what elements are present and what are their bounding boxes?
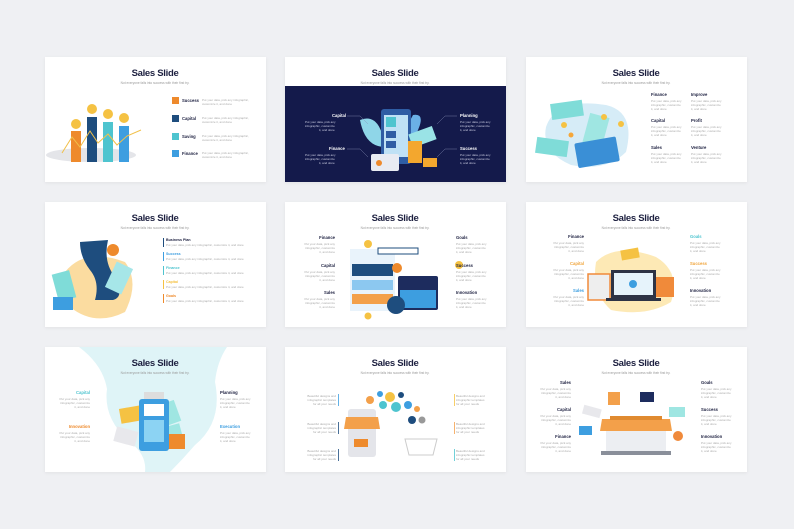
labels: Capital bbox=[332, 113, 346, 118]
labels: Success bbox=[690, 261, 708, 266]
six text items: Put your data, pick any bbox=[691, 125, 722, 129]
list: Goals bbox=[166, 294, 176, 298]
title: Sales Slide bbox=[613, 358, 659, 369]
six text items: infographic, customize bbox=[691, 103, 721, 107]
labels: Sales bbox=[560, 380, 572, 385]
labels: it, and done bbox=[555, 395, 571, 399]
labels: Put your data, pick any bbox=[460, 120, 491, 124]
labels: infographic, customize bbox=[701, 445, 731, 449]
labels: Put your data, pick any bbox=[540, 441, 571, 445]
labels: Put your data, pick any bbox=[305, 153, 336, 157]
six text items: infographic, customize bbox=[651, 129, 681, 133]
labels: Goals bbox=[690, 234, 702, 239]
slide 5: briefcase web: infographic, customize bbox=[456, 274, 486, 278]
list: success/capital/saving/finance: Put your data, pick any infographic, bbox=[202, 134, 249, 138]
list: Put your data, pick any infographic, customize it, and done bbox=[166, 299, 244, 303]
title: Sales Slide bbox=[132, 358, 178, 369]
slide 2: dark mobile banking bbox=[285, 57, 506, 182]
labels: Innovation bbox=[690, 288, 712, 293]
labels: Sales bbox=[573, 288, 585, 293]
subtitle: Not everyone falls into success with their first try. bbox=[361, 81, 429, 85]
six text items: infographic, customize bbox=[691, 129, 721, 133]
labels: infographic, customize bbox=[220, 401, 250, 405]
labels: Success bbox=[701, 407, 719, 412]
labels: it, and done bbox=[701, 395, 717, 399]
text blocks: infographic templates bbox=[307, 453, 336, 457]
six text items: infographic, customize bbox=[651, 156, 681, 160]
labels: it, and done bbox=[319, 128, 335, 132]
text blocks: infographic templates bbox=[456, 426, 485, 430]
labels: Put your data, pick any bbox=[701, 441, 732, 445]
labels: infographic, customize bbox=[60, 435, 90, 439]
slide 4: receipt list bbox=[45, 202, 266, 327]
labels: Put your data, pick any bbox=[304, 270, 335, 274]
labels: it, and done bbox=[460, 128, 476, 132]
laptop illustration bbox=[588, 248, 674, 312]
list: success/capital/saving/finance bbox=[172, 97, 249, 159]
labels: Put your data, pick any bbox=[220, 431, 251, 435]
list: success/capital/saving/finance: Put your data, pick any infographic, bbox=[202, 116, 249, 120]
labels: infographic, customize bbox=[60, 401, 90, 405]
labels: infographic, customize bbox=[541, 445, 571, 449]
wallet illustration bbox=[535, 100, 628, 168]
six text items: infographic, customize bbox=[651, 103, 681, 107]
labels: infographic, customize bbox=[541, 418, 571, 422]
labels: it, and done bbox=[319, 278, 335, 282]
list: success/capital/saving/finance: Put your data, pick any infographic, bbox=[202, 151, 249, 155]
labels: Put your data, pick any bbox=[553, 241, 584, 245]
list: success/capital/saving/finance: Success bbox=[182, 98, 200, 103]
subtitle: Not everyone falls into success with their first try. bbox=[121, 81, 189, 85]
six text items: Capital bbox=[651, 118, 665, 123]
labels: it, and done bbox=[690, 276, 706, 280]
labels: Innovation bbox=[69, 424, 90, 429]
labels: Put your data, pick any bbox=[553, 268, 584, 272]
title: Sales Slide bbox=[613, 213, 659, 224]
labels: infographic, customize bbox=[460, 157, 490, 161]
slide 5: briefcase web: it, and done bbox=[456, 278, 472, 282]
labels: Put your data, pick any bbox=[553, 295, 584, 299]
labels: it, and done bbox=[220, 439, 236, 443]
labels bbox=[59, 390, 251, 443]
labels: Put your data, pick any bbox=[701, 414, 732, 418]
labels: Put your data, pick any bbox=[540, 414, 571, 418]
slide 3: wallet money bbox=[526, 57, 747, 182]
six text items: it, and done bbox=[651, 160, 667, 164]
labels: Put your data, pick any bbox=[690, 241, 721, 245]
labels: infographic, customize bbox=[305, 301, 335, 305]
slide 5: briefcase web: Put your data, pick any bbox=[456, 242, 487, 246]
labels: Capital bbox=[557, 407, 571, 412]
list: Business Plan bbox=[166, 238, 191, 242]
labels bbox=[305, 113, 491, 165]
slide 9: store awning bbox=[526, 347, 747, 472]
labels: Goals bbox=[701, 380, 713, 385]
labels: it, and done bbox=[319, 305, 335, 309]
six text items: Put your data, pick any bbox=[691, 99, 722, 103]
labels: Capital bbox=[76, 390, 90, 395]
labels bbox=[540, 380, 732, 453]
slide 6: laptop shopping bbox=[526, 202, 747, 327]
labels: infographic, customize bbox=[460, 124, 490, 128]
six text items: it, and done bbox=[691, 160, 707, 164]
labels: it, and done bbox=[555, 449, 571, 453]
list: Put your data, pick any infographic, customize it, and done bbox=[166, 257, 244, 261]
slide 5: briefcase web bbox=[285, 202, 506, 327]
labels: Put your data, pick any bbox=[540, 387, 571, 391]
text blocks: infographic templates bbox=[456, 398, 485, 402]
labels: it, and done bbox=[555, 422, 571, 426]
text blocks: Beautiful designs and bbox=[307, 449, 336, 453]
store illustration bbox=[579, 392, 685, 455]
labels: infographic, customize bbox=[554, 245, 584, 249]
title: Sales Slide bbox=[372, 213, 418, 224]
text blocks: for all your needs bbox=[456, 457, 480, 461]
list: Put your data, pick any infographic, customize it, and done bbox=[166, 271, 244, 275]
six text items: Put your data, pick any bbox=[691, 152, 722, 156]
labels: it, and done bbox=[568, 303, 584, 307]
title: Sales Slide bbox=[132, 68, 178, 79]
six text items: it, and done bbox=[691, 133, 707, 137]
title: Sales Slide bbox=[132, 213, 178, 224]
bar chart bbox=[46, 104, 141, 162]
text blocks: for all your needs bbox=[313, 402, 336, 406]
labels bbox=[304, 235, 336, 309]
labels: Put your data, pick any bbox=[59, 431, 90, 435]
labels: infographic, customize bbox=[305, 246, 335, 250]
labels: infographic, customize bbox=[220, 435, 250, 439]
list: success/capital/saving/finance: Put your data, pick any infographic, bbox=[202, 98, 249, 102]
subtitle: Not everyone falls into success with their first try. bbox=[602, 371, 670, 375]
list: success/capital/saving/finance: customize it, and done bbox=[202, 155, 232, 159]
subtitle: Not everyone falls into success with their first try. bbox=[361, 226, 429, 230]
list: success/capital/saving/finance: Saving bbox=[182, 134, 196, 139]
subtitle: Not everyone falls into success with their first try. bbox=[121, 226, 189, 230]
six text items: Profit bbox=[691, 118, 703, 123]
labels: Put your data, pick any bbox=[304, 297, 335, 301]
labels: Put your data, pick any bbox=[701, 387, 732, 391]
labels: Put your data, pick any bbox=[59, 397, 90, 401]
labels: infographic, customize bbox=[690, 272, 720, 276]
receipt illustration bbox=[52, 240, 133, 318]
labels bbox=[553, 234, 721, 307]
text blocks: for all your needs bbox=[313, 430, 336, 434]
text blocks: infographic templates bbox=[456, 453, 485, 457]
text blocks bbox=[307, 394, 485, 461]
labels: Capital bbox=[570, 261, 584, 266]
text blocks: for all your needs bbox=[456, 430, 480, 434]
labels: it, and done bbox=[220, 405, 236, 409]
text blocks: for all your needs bbox=[456, 402, 480, 406]
labels: infographic, customize bbox=[305, 124, 335, 128]
subtitle: Not everyone falls into success with their first try. bbox=[602, 226, 670, 230]
terminal illustration bbox=[113, 392, 185, 451]
text blocks: Beautiful designs and bbox=[307, 422, 336, 426]
labels: it, and done bbox=[319, 250, 335, 254]
labels: infographic, customize bbox=[305, 157, 335, 161]
labels: infographic, customize bbox=[305, 274, 335, 278]
labels: infographic, customize bbox=[701, 418, 731, 422]
labels: Capital bbox=[321, 263, 335, 268]
labels: Planning bbox=[460, 113, 478, 118]
labels: infographic, customize bbox=[554, 299, 584, 303]
labels: Finance bbox=[329, 146, 345, 151]
labels: it, and done bbox=[460, 161, 476, 165]
six text items: Put your data, pick any bbox=[651, 152, 682, 156]
slide 5: briefcase web: Goals bbox=[456, 235, 468, 240]
labels: it, and done bbox=[74, 439, 90, 443]
slide 5: briefcase web: Success bbox=[456, 263, 474, 268]
subtitle: Not everyone falls into success with their first try. bbox=[602, 81, 670, 85]
six text items: Venture bbox=[691, 145, 707, 150]
labels: infographic, customize bbox=[690, 245, 720, 249]
labels: Put your data, pick any bbox=[305, 120, 336, 124]
labels: Sales bbox=[324, 290, 336, 295]
labels: Finance bbox=[568, 234, 585, 239]
labels: it, and done bbox=[74, 405, 90, 409]
labels: it, and done bbox=[690, 303, 706, 307]
labels: Put your data, pick any bbox=[304, 242, 335, 246]
list: Success bbox=[166, 252, 181, 256]
text blocks: Beautiful designs and bbox=[456, 449, 485, 453]
list: success/capital/saving/finance: customize it, and done bbox=[202, 138, 232, 142]
list: success/capital/saving/finance: Finance bbox=[182, 151, 198, 156]
list: Put your data, pick any infographic, customize it, and done bbox=[166, 285, 244, 289]
six text items: Put your data, pick any bbox=[651, 99, 682, 103]
slide 1: bar chart bbox=[45, 57, 266, 182]
six text items: it, and done bbox=[651, 107, 667, 111]
phone illustration bbox=[360, 109, 437, 171]
slide 7: card terminal bbox=[45, 347, 266, 472]
labels: it, and done bbox=[701, 449, 717, 453]
slide 5: briefcase web: Innovation bbox=[456, 290, 478, 295]
labels: Planning bbox=[220, 390, 238, 395]
six text items: it, and done bbox=[651, 133, 667, 137]
labels: Finance bbox=[555, 434, 572, 439]
list bbox=[163, 238, 244, 303]
web illustration bbox=[350, 240, 463, 320]
labels: it, and done bbox=[568, 249, 584, 253]
labels: it, and done bbox=[319, 161, 335, 165]
title: Sales Slide bbox=[372, 68, 418, 79]
slide 5: briefcase web: infographic, customize bbox=[456, 301, 486, 305]
list: Finance bbox=[166, 266, 180, 270]
six text items: Finance bbox=[651, 92, 667, 97]
list: success/capital/saving/finance: customize it, and done bbox=[202, 102, 232, 106]
labels: infographic, customize bbox=[554, 272, 584, 276]
six text items: infographic, customize bbox=[691, 156, 721, 160]
list: Put your data, pick any infographic, customize it, and done bbox=[166, 243, 244, 247]
slide 5: briefcase web: Put your data, pick any bbox=[456, 297, 487, 301]
list: Capital bbox=[166, 280, 178, 284]
text blocks: infographic templates bbox=[307, 398, 336, 402]
slide 8: online shop bbox=[285, 347, 506, 472]
list: success/capital/saving/finance: customize it, and done bbox=[202, 120, 232, 124]
shop illustration bbox=[344, 391, 437, 457]
six text items: Put your data, pick any bbox=[651, 125, 682, 129]
slide 5: briefcase web: Put your data, pick any bbox=[456, 270, 487, 274]
labels: Put your data, pick any bbox=[220, 397, 251, 401]
labels: Put your data, pick any bbox=[690, 268, 721, 272]
labels: Put your data, pick any bbox=[690, 295, 721, 299]
slide 5: briefcase web: it, and done bbox=[456, 305, 472, 309]
background blob bbox=[79, 347, 227, 472]
labels: Success bbox=[460, 146, 478, 151]
slide 5: briefcase web: infographic, customize bbox=[456, 246, 486, 250]
labels: it, and done bbox=[701, 422, 717, 426]
text blocks: Beautiful designs and bbox=[307, 394, 336, 398]
title: Sales Slide bbox=[613, 68, 659, 79]
text blocks: for all your needs bbox=[313, 457, 336, 461]
six text items: Improve bbox=[691, 92, 708, 97]
subtitle: Not everyone falls into success with their first try. bbox=[121, 371, 189, 375]
text blocks: Beautiful designs and bbox=[456, 394, 485, 398]
labels: Execution bbox=[220, 424, 240, 429]
title: Sales Slide bbox=[372, 358, 418, 369]
dark panel bbox=[285, 86, 506, 182]
labels: infographic, customize bbox=[541, 391, 571, 395]
text blocks: infographic templates bbox=[307, 426, 336, 430]
subtitle: Not everyone falls into success with their first try. bbox=[361, 371, 429, 375]
labels: infographic, customize bbox=[701, 391, 731, 395]
labels: infographic, customize bbox=[690, 299, 720, 303]
labels: it, and done bbox=[568, 276, 584, 280]
labels: it, and done bbox=[690, 249, 706, 253]
text blocks: Beautiful designs and bbox=[456, 422, 485, 426]
six text items bbox=[651, 92, 722, 164]
labels: Finance bbox=[319, 235, 336, 240]
six text items: Sales bbox=[651, 145, 663, 150]
labels: Innovation bbox=[701, 434, 723, 439]
six text items: it, and done bbox=[691, 107, 707, 111]
list: success/capital/saving/finance: Capital bbox=[182, 116, 196, 121]
labels: Put your data, pick any bbox=[460, 153, 491, 157]
slide 5: briefcase web: it, and done bbox=[456, 250, 472, 254]
